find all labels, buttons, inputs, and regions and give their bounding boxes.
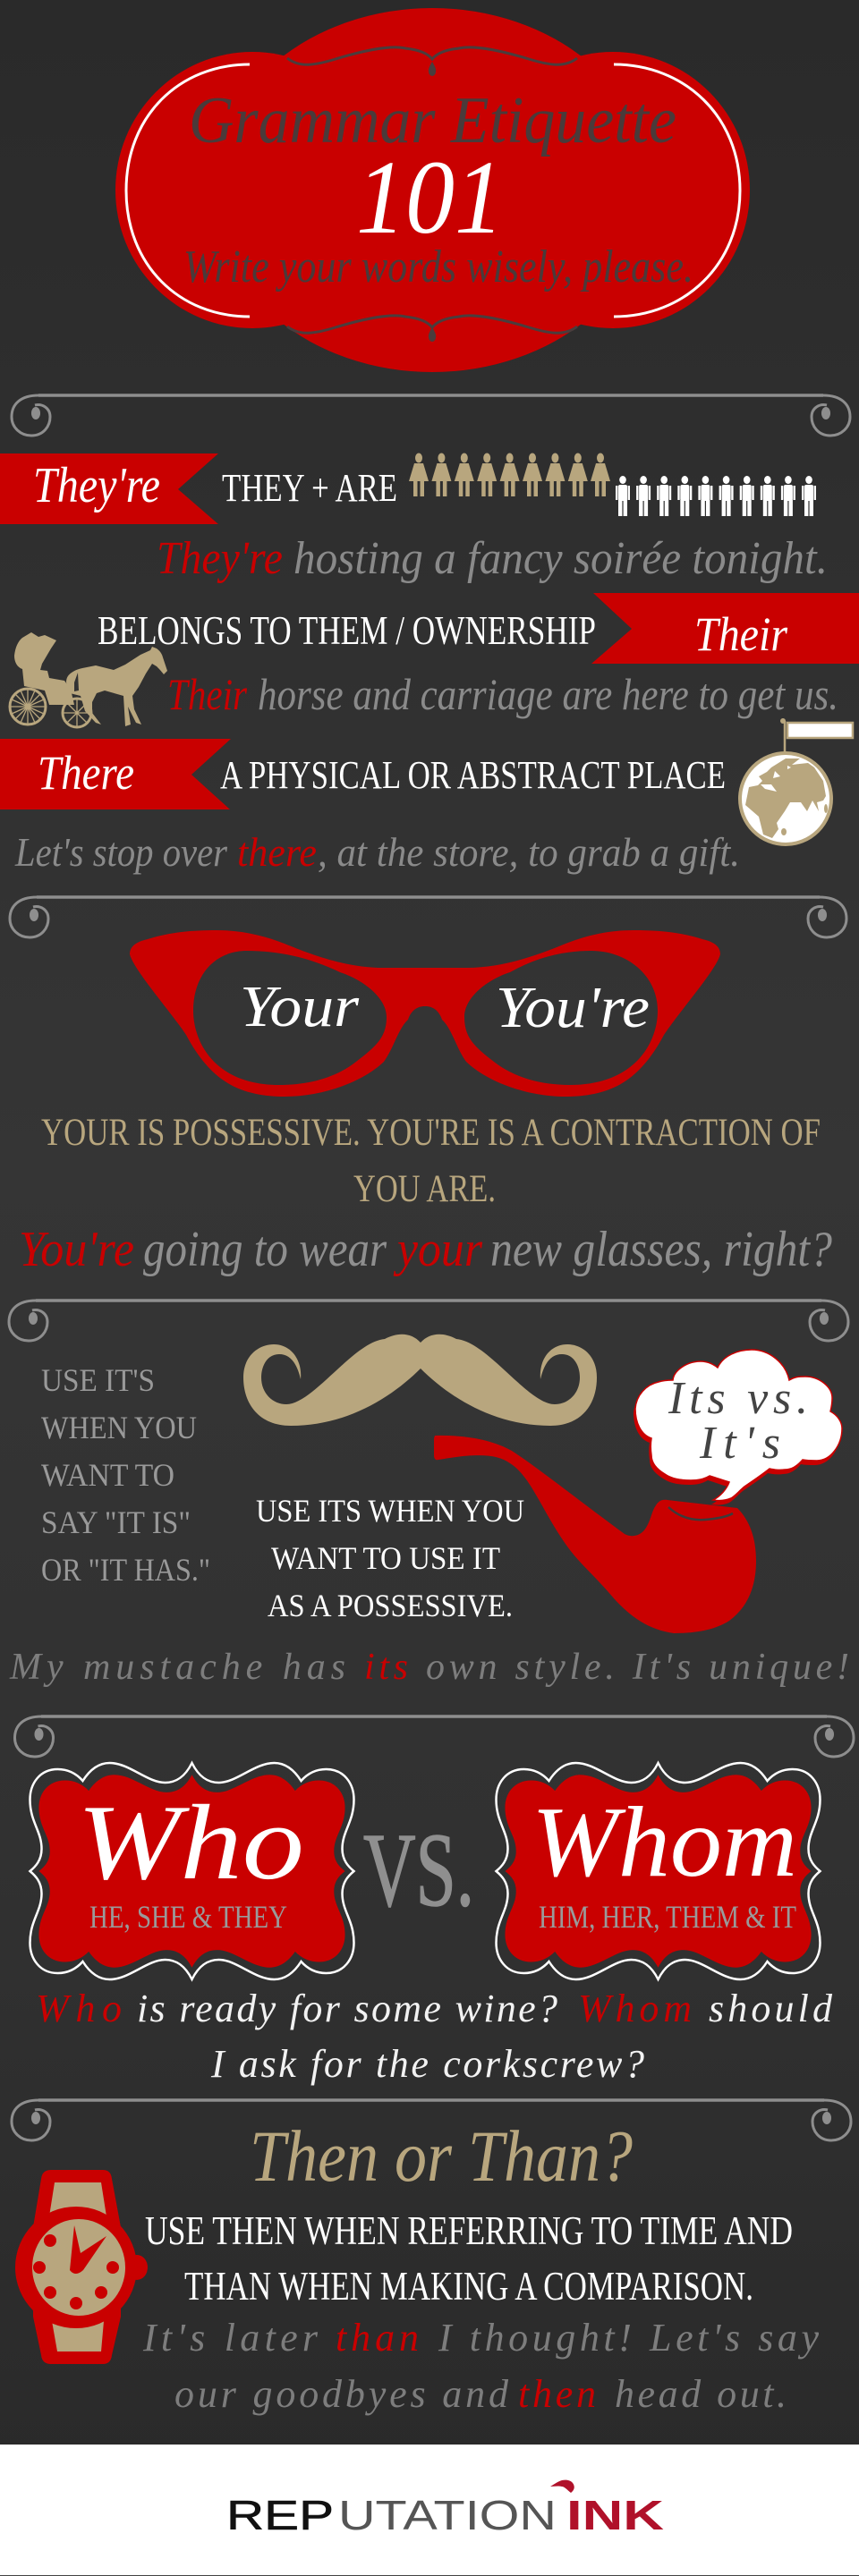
example sentence: there	[237, 829, 317, 875]
pronouns: him, her, them and it: HIM, HER, THEM & IT	[539, 1899, 796, 1935]
footer with logo	[0, 2445, 859, 2576]
example sentence: then	[518, 2372, 596, 2416]
panel: there	[0, 718, 853, 875]
example sentence: They're	[157, 533, 283, 584]
title badge	[115, 8, 750, 372]
heading: Then or Than?	[250, 2115, 633, 2197]
logo wordmark: REP	[226, 2492, 334, 2538]
example sentence	[19, 1222, 832, 1277]
logo wordmark	[226, 2480, 664, 2538]
explanation text	[145, 2208, 793, 2309]
bubble text: Its vs.	[668, 1373, 808, 1424]
scroll divider 2	[10, 897, 846, 937]
panel: who vs whom	[30, 1763, 833, 2086]
heading: ownership: BELONGS TO THEM / OWNERSHIP	[98, 608, 596, 653]
example sentence	[36, 1987, 833, 2086]
label: Who	[30, 1763, 354, 1979]
example sentence: head out.	[615, 2372, 787, 2416]
title: Grammar Etiquette: Grammar Etiquette	[189, 84, 676, 157]
explanation text	[41, 1112, 821, 1210]
icon: red cat-eye glasses	[130, 930, 720, 1097]
pronouns: he, she and they: HE, SHE & THEY	[89, 1899, 287, 1935]
text: use its: WANT TO USE IT	[271, 1540, 500, 1576]
banner label: Their	[694, 607, 788, 661]
example sentence	[14, 829, 740, 875]
example sentence: own style. It's unique!	[426, 1647, 849, 1688]
example sentence: Let's stop over	[14, 829, 228, 875]
panel: their	[10, 593, 859, 727]
example sentence	[9, 1647, 849, 1688]
label: VS.: VS.	[363, 1811, 474, 1928]
scroll divider 5	[12, 2100, 851, 2140]
icon: women row	[409, 453, 610, 496]
text: use it's: OR "IT HAS."	[41, 1552, 210, 1588]
heading: they + are: THEY + ARE	[222, 466, 397, 510]
subtitle: Write your words wisely, please.	[183, 242, 693, 292]
icon: mustache	[243, 1335, 597, 1426]
word: Who: Who	[77, 1783, 304, 1902]
example sentence: It's later	[142, 2316, 319, 2360]
example sentence: is ready for some wine?	[137, 1987, 557, 2030]
lens text: You're: You're	[496, 975, 650, 1040]
banner label: There	[38, 746, 134, 800]
logo wordmark: INK	[566, 2492, 664, 2538]
banner: Their	[591, 593, 859, 664]
text: use it's	[41, 1362, 210, 1588]
icon: horse and carriage	[10, 632, 167, 727]
scroll divider 3	[9, 1301, 848, 1341]
banner label: They're	[33, 458, 160, 513]
title: 101: 101	[356, 139, 504, 256]
example sentence: hosting a fancy soirée tonight.	[293, 533, 828, 584]
logo wordmark: UTATION	[338, 2492, 557, 2538]
word: Whom: Whom	[532, 1787, 797, 1898]
scroll divider 4	[14, 1716, 854, 1757]
lens text: Your: Your	[240, 974, 359, 1039]
scroll divider 1	[12, 395, 850, 436]
example sentence	[142, 2316, 819, 2416]
example sentence: our goodbyes and	[174, 2372, 509, 2416]
icon: wristwatch	[15, 2170, 148, 2364]
text: use it's: USE IT'S	[41, 1362, 155, 1398]
example sentence: than	[336, 2316, 419, 2360]
speech bubble	[634, 1350, 842, 1505]
label: Whom	[496, 1763, 820, 1979]
text: use it's: SAY "IT IS"	[41, 1504, 191, 1540]
icon: men row	[616, 476, 816, 516]
icon: pipe	[434, 1436, 756, 1633]
example sentence: My mustache has	[9, 1647, 345, 1688]
text: use its: AS A POSSESSIVE.	[268, 1588, 513, 1623]
explanation text: YOU ARE.	[353, 1168, 496, 1210]
text: use it's: WHEN YOU	[41, 1410, 197, 1445]
panel: its vs it's	[9, 1335, 849, 1688]
icon: globe with flag	[740, 718, 853, 844]
panel: your vs you're	[19, 930, 832, 1277]
bubble text: It's	[699, 1418, 780, 1469]
panel: they're	[0, 453, 828, 584]
example sentence: Their	[167, 669, 247, 719]
text: use its: USE ITS WHEN YOU	[256, 1493, 524, 1529]
example sentence: Who	[36, 1987, 122, 2030]
banner: There	[0, 739, 231, 809]
example sentence: its	[364, 1647, 408, 1688]
example sentence: should	[709, 1987, 833, 2030]
example sentence: I ask for the corkscrew?	[210, 2042, 644, 2086]
example sentence: Whom	[578, 1987, 692, 2030]
text: use it's: WANT TO	[41, 1457, 174, 1493]
heading: place: A PHYSICAL OR ABSTRACT PLACE	[220, 753, 726, 797]
example sentence: I thought! Let's say	[438, 2316, 819, 2360]
banner: They're	[0, 453, 218, 524]
example sentence: going to wear	[143, 1222, 387, 1277]
example sentence: , at the store, to grab a gift.	[318, 829, 740, 875]
panel: then or than	[15, 2115, 819, 2416]
text: use its	[256, 1493, 524, 1623]
bubble text	[668, 1373, 808, 1469]
example sentence: your	[393, 1222, 482, 1277]
example sentence: You're	[19, 1222, 134, 1277]
